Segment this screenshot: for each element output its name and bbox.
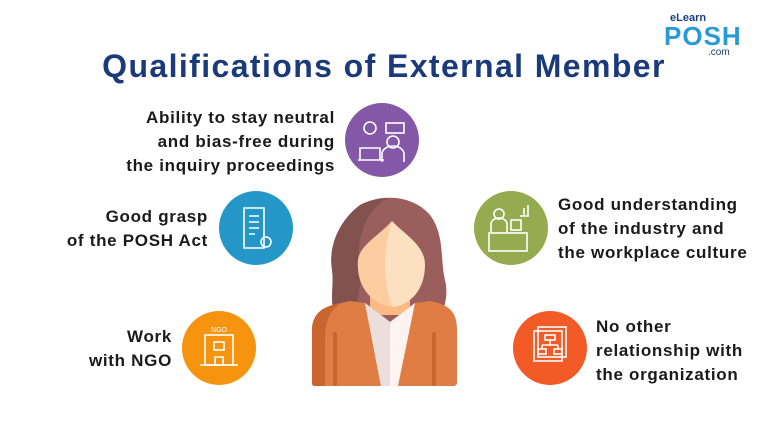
text: industry: of the industry and — [558, 219, 724, 238]
text: NGO — [89, 327, 172, 370]
icon: blue document — [219, 191, 293, 265]
text: neutral — [126, 108, 335, 175]
text: POSH act: Good grasp — [106, 207, 208, 226]
text: neutral: and bias-free during — [158, 132, 335, 151]
text: industry — [558, 195, 747, 262]
title: Qualifications of External Member — [102, 48, 666, 84]
text: POSH act — [67, 207, 208, 250]
figure: woman — [312, 198, 457, 386]
text: NGO: with NGO — [89, 351, 172, 370]
logo: eLearn — [670, 12, 706, 24]
icon: red org chart — [513, 311, 587, 385]
logo: .com — [708, 47, 730, 58]
text: relationship — [596, 317, 743, 384]
logo: POSH — [664, 21, 742, 51]
text: neutral: the inquiry proceedings — [126, 156, 335, 175]
text: relationship: No other — [596, 317, 671, 336]
icon: orange NGO building: NGO — [211, 327, 228, 334]
icon: purple interview — [345, 103, 419, 177]
text: relationship: the organization — [596, 365, 738, 384]
icon: green desk — [474, 191, 548, 265]
text: relationship: relationship with — [596, 341, 743, 360]
text: POSH act: of the POSH Act — [67, 231, 208, 250]
logo — [664, 12, 742, 58]
text: NGO: Work — [127, 327, 172, 346]
text: industry: the workplace culture — [558, 243, 747, 262]
text: industry: Good understanding — [558, 195, 738, 214]
text: neutral: Ability to stay neutral — [146, 108, 335, 127]
icon: orange NGO building — [182, 311, 256, 385]
